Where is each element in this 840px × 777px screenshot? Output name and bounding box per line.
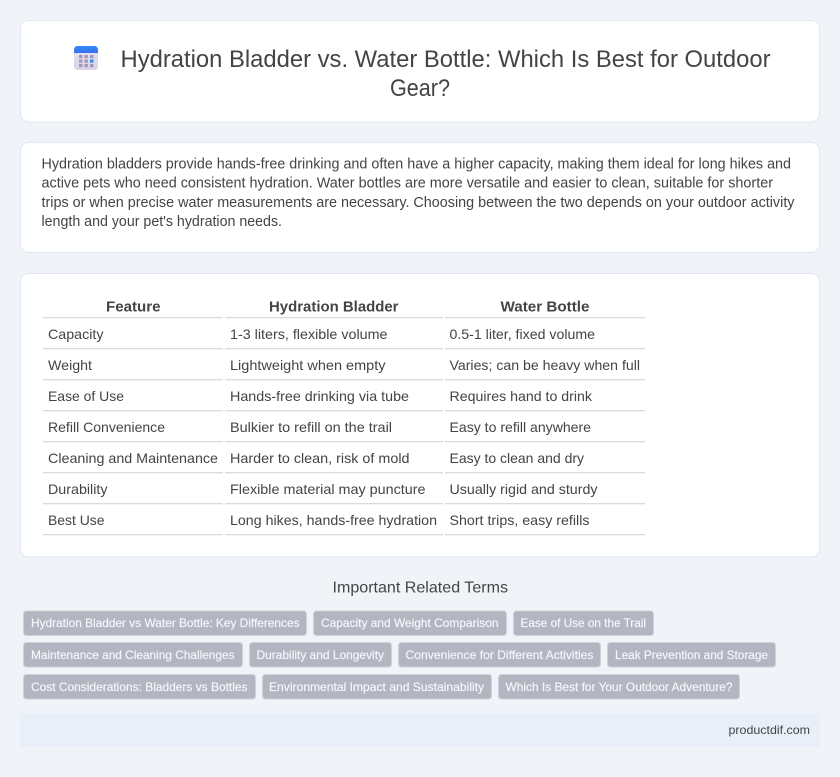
row: durability: Durability [48,481,108,497]
tag: Cost Considerations: Bladders vs Bottles [31,680,248,694]
tag: Which Is Best for Your Outdoor Adventure? [506,680,733,694]
table header row: Water Bottle [500,300,590,316]
tag: Convenience for Different Activities [406,648,594,662]
tag: Leak Prevention and Storage [615,648,768,662]
row: weight: Lightweight when empty [230,357,386,373]
tag [262,674,492,699]
table header row [106,300,590,316]
table header row: Hydration Bladder [269,300,399,316]
tag [398,642,600,667]
summary text: active pets who need consistent hydration. Water bottles are more versatile and easier to clean, suitable for shorter [42,176,773,192]
row: ease of use: Ease of Use [48,388,124,404]
row: cleaning and maintenance: Harder to clean, risk of mold [230,450,410,466]
tag [514,611,654,636]
row: best use: Best Use [48,512,105,528]
row: ease of use: Hands-free drinking via tube [230,388,409,404]
row: capacity: 0.5-1 liter, fixed volume [450,326,595,342]
row: durability: Usually rigid and sturdy [450,481,598,497]
row: best use: Short trips, easy refills [450,512,590,528]
tag [24,611,306,636]
row: best use: Long hikes, hands-free hydration [230,512,437,528]
summary text: length and your pet's hydration needs. [42,214,282,230]
tag: Capacity and Weight Comparison [321,616,498,630]
row: cleaning and maintenance: Easy to clean and dry [450,450,584,466]
tag: Maintenance and Cleaning Challenges [31,648,234,662]
row: refill convenience [48,419,591,435]
row: weight [48,357,640,373]
panel: title header [20,20,820,122]
row: capacity: 1-3 liters, flexible volume [230,326,388,342]
tag [498,674,740,699]
row: cleaning and maintenance [48,450,584,466]
tag [314,611,506,636]
row: ease of use [48,388,593,404]
row: best use [48,512,590,528]
row: durability: Flexible material may puncture [230,481,426,497]
title: Hydration Bladder vs. Water Bottle: Which Is Best for Outdoor [120,46,771,73]
row: cleaning and maintenance: Cleaning and Maintenance [48,450,218,466]
tag [24,642,242,667]
table header row: Feature [106,300,160,316]
tag [608,642,776,667]
tag: Durability and Longevity [256,648,384,662]
row: durability [48,481,598,497]
summary text: trips or when precise water measurements are necessary. Choosing between the two depends on your outdoor activity [42,195,795,211]
row: capacity [48,326,595,342]
row: refill convenience: Refill Convenience [48,419,165,435]
row: ease of use: Requires hand to drink [450,388,593,404]
tag: Environmental Impact and Sustainability [269,680,484,694]
panel: summary paragraph [20,142,820,252]
panel: related term tags [24,611,776,699]
title: Gear? [390,75,450,102]
row: refill convenience: Bulkier to refill on the trail [230,419,392,435]
footer source text: productdif.com [728,723,810,737]
row: refill convenience: Easy to refill anywhere [450,419,591,435]
tag [250,642,392,667]
row: capacity: Capacity [48,326,104,342]
icon: calendar [74,46,98,70]
row: weight: Varies; can be heavy when full [450,357,640,373]
row: weight: Weight [48,357,92,373]
tag: Hydration Bladder vs Water Bottle: Key Differences [31,616,300,630]
tag: Ease of Use on the Trail [520,616,646,630]
heading: important related terms: Important Related Terms [332,580,508,596]
panel: comparison table [20,274,820,557]
tag [24,674,256,699]
footer bar [20,713,820,747]
summary text: Hydration bladders provide hands-free drinking and often have a higher capacity, making them ideal for long hikes and [42,156,791,172]
